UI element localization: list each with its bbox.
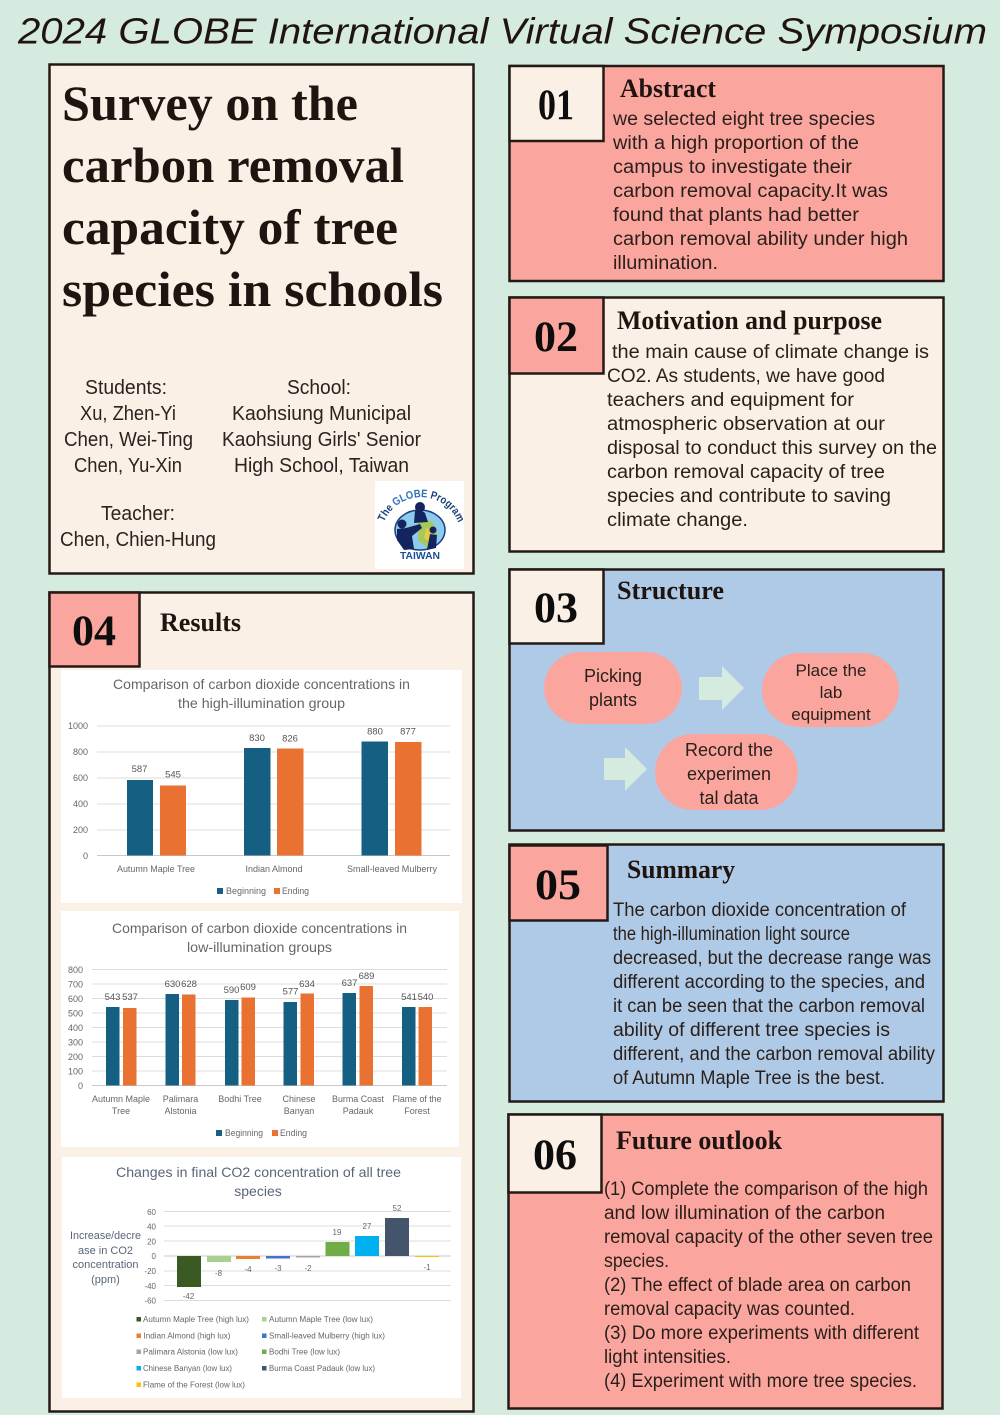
bar chart: changes in final CO2 concentration: 60 <box>147 1208 157 1217</box>
panel: 05 summary <box>510 844 944 1102</box>
icon: GLOBE Program Taiwan logo: TAIWAN <box>400 550 440 562</box>
text: motivation body: atmospheric observation at our <box>607 414 886 435</box>
bar chart: changes in final CO2 concentration: -1 <box>423 1263 431 1272</box>
text: abstract body: we selected eight tree species <box>612 109 875 130</box>
title: 2024 GLOBE International Virtual Science Symposium <box>17 10 987 52</box>
text: summary body: it can be seen that the carbon removal <box>613 996 925 1017</box>
text: future outlook body: (2) The effect of blade area on carbon <box>604 1275 911 1296</box>
bar chart: low-illumination groups: 700 <box>68 980 83 990</box>
bar chart: low-illumination groups: 800 <box>68 965 83 975</box>
step: record the experimental data <box>655 734 798 810</box>
text: abstract body: carbon removal ability under high <box>613 229 908 250</box>
text: abstract body: campus to investigate their <box>613 157 853 178</box>
bar chart: high-illumination group: Indian Almond <box>246 864 302 874</box>
bar chart: low-illumination groups: 537 <box>122 992 138 1003</box>
bar chart: changes in final CO2 concentration: 40 <box>147 1222 157 1232</box>
text: future outlook body: light intensities. <box>604 1347 731 1368</box>
text: future outlook body: and low illumination of the carbon <box>604 1203 885 1224</box>
bar chart: high-illumination group: Ending <box>282 886 309 896</box>
text: school <box>222 377 421 477</box>
bar chart: high-illumination group: 877 <box>400 726 416 738</box>
bar chart: low-illumination groups: 500 <box>68 1008 83 1018</box>
text: motivation body: climate change. <box>607 510 748 531</box>
text: teacher: Teacher: <box>101 503 175 525</box>
text: school: Kaohsiung Municipal <box>232 403 411 425</box>
heading: structure: Structure <box>617 576 724 605</box>
text: abstract body <box>612 109 908 274</box>
legend: Chinese Banyan (low lux) <box>143 1364 232 1373</box>
heading: results: Results <box>160 608 241 637</box>
heading: survey title: capacity of tree <box>62 199 398 255</box>
bar chart: high-illumination group: the high-illumination group <box>178 695 345 711</box>
step: record the experimental data: experimen <box>687 764 771 784</box>
bar chart: low-illumination groups: 200 <box>68 1052 83 1062</box>
panel: 01 abstract <box>510 66 944 281</box>
text: summary body: different, and the carbon removal ability <box>613 1044 935 1065</box>
bar chart: high-illumination group: 400 <box>73 799 88 809</box>
bar chart: low-illumination groups: Banyan <box>284 1106 314 1116</box>
arrow: step 1 to step 2 <box>699 666 744 710</box>
bar chart: low-illumination groups: 630 <box>165 979 180 990</box>
text: students: Xu, Zhen-Yi <box>80 403 176 425</box>
axis label: concentration <box>72 1259 139 1271</box>
axis label: Increase/decre <box>70 1230 141 1242</box>
bar chart: low-illumination groups: Comparison of carbon dioxide concentrations in <box>112 920 407 936</box>
number badge: 06 <box>508 1114 602 1192</box>
text: motivation body: carbon removal capacity of tree <box>607 462 885 483</box>
axis label: ase in CO2 <box>78 1245 133 1257</box>
legend: Bodhi Tree (low lux) <box>269 1348 340 1356</box>
bar chart: high-illumination group: 1000 <box>68 721 88 731</box>
bar chart: high-illumination group: 830 <box>249 733 265 744</box>
bar chart: low-illumination groups: 300 <box>68 1038 83 1048</box>
text: abstract body: illumination. <box>613 253 718 274</box>
bar chart: low-illumination groups: 590 <box>224 985 239 996</box>
bar chart: high-illumination group: 200 <box>73 825 88 835</box>
text: students: Chen, Yu-Xin <box>74 455 182 477</box>
bar chart: changes in final CO2 concentration: 20 <box>147 1238 157 1246</box>
heading: survey title: Survey on the <box>62 75 358 131</box>
bar chart: low-illumination groups: Tree <box>112 1106 130 1116</box>
text: future outlook body <box>604 1179 933 1392</box>
panel: 06 future outlook <box>508 1114 942 1408</box>
text: abstract body: carbon removal capacity.It was <box>613 181 888 202</box>
text: summary body: the high-illumination light source <box>613 924 850 945</box>
legend: Autumn Maple Tree (low lux) <box>269 1315 373 1324</box>
legend: Indian Almond (high lux) <box>144 1332 231 1340</box>
text: future outlook body: species. <box>604 1251 669 1272</box>
step: picking plants: Picking <box>584 666 642 686</box>
heading: survey title: carbon removal <box>62 137 404 193</box>
heading: motivation and purpose: Motivation and purpose <box>617 306 882 335</box>
step: place the lab equipment <box>762 653 899 727</box>
panel: 03 structure <box>510 570 944 830</box>
bar chart: low-illumination groups: 400 <box>68 1023 83 1033</box>
bar chart: changes in final CO2 concentration <box>62 1157 461 1398</box>
text: school: Kaohsiung Girls' Senior <box>222 429 421 451</box>
bar chart: high-illumination group: Autumn Maple Tree <box>117 864 195 874</box>
text: summary body <box>613 900 935 1089</box>
text: future outlook body: removal capacity of the other seven tree <box>604 1227 933 1248</box>
number badge: 03 <box>510 570 604 644</box>
bar chart: low-illumination groups: Alstonia <box>164 1106 197 1116</box>
bar chart: changes in final CO2 concentration: -60 <box>144 1296 157 1306</box>
text: summary body: of Autumn Maple Tree is the best. <box>613 1068 885 1089</box>
step: place the lab equipment: equipment <box>791 705 871 724</box>
legend: Flame of the Forest (low lux) <box>143 1380 245 1390</box>
bar chart: low-illumination groups: Ending <box>280 1128 307 1138</box>
bar chart: low-illumination groups: 689 <box>359 971 374 982</box>
bar chart: changes in final CO2 concentration: -4 <box>244 1265 252 1274</box>
bar chart: low-illumination groups: low-illumination groups <box>187 939 332 955</box>
bar chart: low-illumination groups <box>61 911 459 1147</box>
bar chart: high-illumination group: 880 <box>367 726 383 738</box>
text: future outlook body: removal capacity was counted. <box>604 1299 855 1320</box>
text: future outlook body: (4) Experiment with more tree species. <box>604 1371 917 1392</box>
number badge: 01: 01 <box>538 82 574 129</box>
number badge: 03: 03 <box>534 585 578 632</box>
icon: GLOBE Program Taiwan logo <box>375 481 464 569</box>
bar chart: changes in final CO2 concentration: 27 <box>363 1222 372 1231</box>
number badge: 01 <box>510 66 604 141</box>
step: record the experimental data: tal data <box>699 788 760 808</box>
bar chart: low-illumination groups: 543 <box>105 992 120 1003</box>
bar chart: high-illumination group: 826 <box>282 734 298 744</box>
bar chart: low-illumination groups: 541 <box>401 992 417 1003</box>
text: teacher <box>60 503 216 551</box>
axis label: (ppm) <box>91 1274 120 1286</box>
bar chart: low-illumination groups: Bodhi Tree <box>218 1094 262 1104</box>
heading: abstract: Abstract <box>620 74 716 103</box>
arrow: step 2 to step 3 <box>604 747 647 791</box>
bar chart: high-illumination group: 0 <box>83 851 88 861</box>
bar chart: changes in final CO2 concentration: -42 <box>183 1292 195 1301</box>
text: motivation body: the main cause of climate change is <box>612 342 929 363</box>
bar chart: high-illumination group: Comparison of carbon dioxide concentrations in <box>113 676 410 692</box>
text: school: High School, Taiwan <box>234 455 409 477</box>
panel: 04 results <box>50 592 474 1412</box>
step: picking plants <box>544 652 682 724</box>
text: summary body: ability of different tree species is <box>613 1020 890 1041</box>
text: abstract body: found that plants had better <box>613 205 860 226</box>
bar chart: high-illumination group: 800 <box>73 747 88 757</box>
step: place the lab equipment: lab <box>820 683 842 702</box>
number badge: 02 <box>510 298 604 374</box>
text: future outlook body: (3) Do more experiments with different <box>604 1323 920 1344</box>
bar chart: high-illumination group: 545 <box>165 770 181 780</box>
heading: survey title <box>62 75 443 317</box>
text: abstract body: with a high proportion of the <box>612 133 859 154</box>
bar chart: changes in final CO2 concentration: -2 <box>304 1264 312 1273</box>
bar chart: low-illumination groups: 577 <box>283 986 298 998</box>
bar chart: low-illumination groups: 637 <box>342 978 357 989</box>
bar chart: low-illumination groups: Chinese <box>282 1094 316 1104</box>
bar chart: low-illumination groups: Padauk <box>343 1106 374 1116</box>
heading: survey title: species in schools <box>62 261 443 317</box>
number badge: 04 <box>50 592 140 666</box>
bar chart: low-illumination groups: Palimara <box>163 1094 198 1104</box>
bar chart: high-illumination group: Beginning <box>226 886 266 896</box>
text: school: School: <box>287 377 351 399</box>
bar chart: high-illumination group: 600 <box>73 773 88 783</box>
step: record the experimental data: Record the <box>685 740 773 760</box>
bar chart: low-illumination groups: 540 <box>418 992 433 1003</box>
icon: GLOBE Program Taiwan logo: The GLOBE Program <box>377 490 464 522</box>
number badge: 02: 02 <box>534 314 578 361</box>
step: place the lab equipment: Place the <box>796 661 866 680</box>
bar chart: low-illumination groups: Beginning <box>225 1128 263 1138</box>
text: future outlook body: (1) Complete the comparison of the high <box>604 1179 928 1200</box>
number badge: 05: 05 <box>535 862 581 909</box>
bar chart: changes in final CO2 concentration: species <box>234 1183 282 1199</box>
number badge: 05 <box>510 846 608 920</box>
bar chart: low-illumination groups: 628 <box>181 979 197 990</box>
bar chart: changes in final CO2 concentration: -3 <box>274 1264 282 1273</box>
legend: Burma Coast Padauk (low lux) <box>269 1364 375 1373</box>
bar chart: low-illumination groups: 0 <box>78 1081 83 1091</box>
bar chart: low-illumination groups: 100 <box>68 1066 83 1076</box>
bar chart: high-illumination group <box>61 670 462 903</box>
text: motivation body: CO2. As students, we have good <box>607 366 885 387</box>
text: motivation body: species and contribute to saving <box>607 486 891 507</box>
text: summary body: decreased, but the decrease range was <box>613 948 931 969</box>
bar chart: low-illumination groups: 634 <box>299 979 315 990</box>
text: students <box>64 377 193 477</box>
text: teacher: Chen, Chien-Hung <box>60 529 216 551</box>
bar chart: changes in final CO2 concentration: -8 <box>215 1269 223 1278</box>
bar chart: changes in final CO2 concentration: 19 <box>333 1228 342 1237</box>
legend: Small-leaved Mulberry (high lux) <box>269 1332 385 1340</box>
heading: future outlook: Future outlook <box>616 1126 783 1155</box>
bar chart: low-illumination groups: Forest <box>404 1106 430 1116</box>
bar chart: high-illumination group: Small-leaved Mulberry <box>347 864 438 874</box>
legend: Palimara Alstonia (low lux) <box>143 1348 238 1356</box>
bar chart: changes in final CO2 concentration: -40 <box>144 1282 157 1291</box>
bar chart: low-illumination groups: 609 <box>240 982 256 993</box>
bar chart: low-illumination groups: Autumn Maple <box>92 1094 150 1104</box>
bar chart: changes in final CO2 concentration: Changes in final CO2 concentration of all tree <box>116 1164 401 1180</box>
text: students: Chen, Wei-Ting <box>64 429 193 451</box>
number badge: 06: 06 <box>533 1132 577 1179</box>
bar chart: high-illumination group: 587 <box>132 764 147 775</box>
text: students: Students: <box>85 377 167 399</box>
text: motivation body <box>607 342 937 531</box>
bar chart: low-illumination groups: Flame of the <box>392 1094 442 1104</box>
text: motivation body: disposal to conduct this survey on the <box>607 438 937 459</box>
bar chart: low-illumination groups: Burma Coast <box>332 1094 384 1104</box>
bar chart: changes in final CO2 concentration: -20 <box>144 1267 157 1276</box>
number badge: 04: 04 <box>72 608 116 655</box>
legend: Autumn Maple Tree (high lux) <box>143 1315 249 1324</box>
panel: 02 motivation and purpose <box>510 298 944 552</box>
panel: poster title and authors <box>48 63 475 575</box>
text: summary body: The carbon dioxide concentration of <box>613 900 907 921</box>
bar chart: changes in final CO2 concentration: 52 <box>393 1204 402 1213</box>
text: motivation body: teachers and equipment for <box>607 390 855 411</box>
text: summary body: different according to the species, and <box>613 972 925 993</box>
legend <box>136 1315 385 1390</box>
bar chart: changes in final CO2 concentration: 0 <box>152 1252 157 1261</box>
step: picking plants: plants <box>589 690 637 710</box>
axis label <box>70 1230 141 1286</box>
heading: summary: Summary <box>627 855 735 884</box>
bar chart: low-illumination groups: 600 <box>68 994 83 1004</box>
